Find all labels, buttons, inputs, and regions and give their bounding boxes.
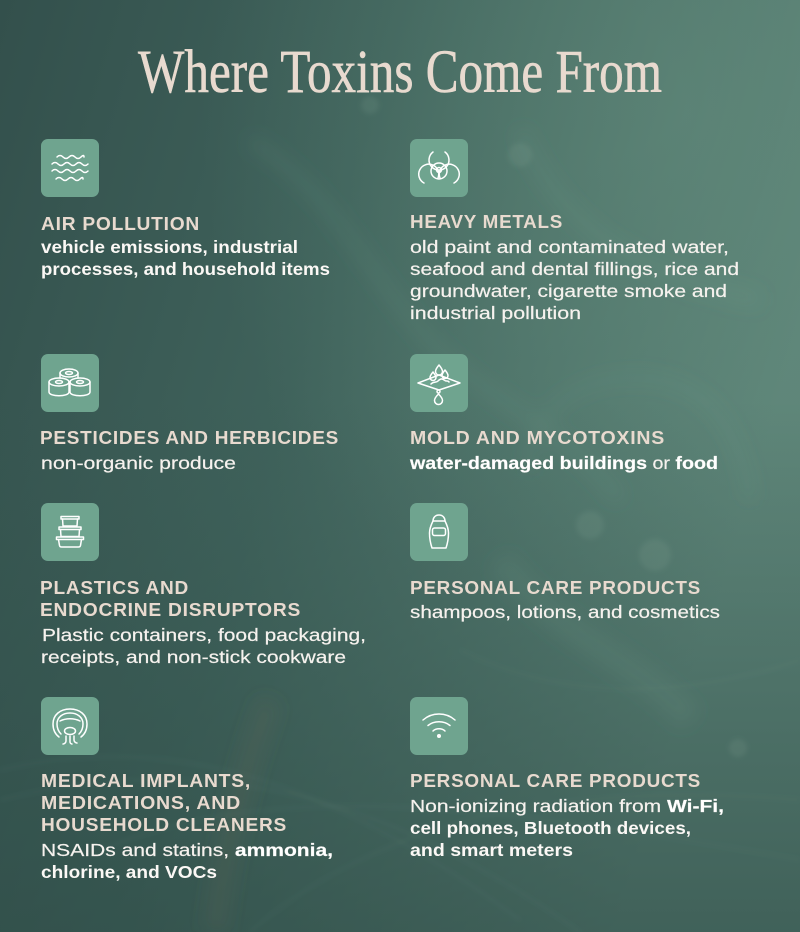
icon: biohazard bbox=[410, 139, 468, 197]
icon: mold drops bbox=[410, 354, 468, 412]
text block bbox=[41, 625, 366, 667]
heading: PESTICIDES AND HERBICIDES bbox=[40, 428, 339, 448]
text block: and smart meters bbox=[410, 840, 573, 860]
text block: seafood and dental fillings, rice and bbox=[410, 259, 739, 279]
text block: shampoos, lotions, and cosmetics bbox=[410, 602, 720, 622]
heading: MEDICAL IMPLANTS, bbox=[41, 771, 251, 791]
panel: pesticides and herbicides bbox=[40, 354, 339, 473]
text block bbox=[41, 840, 333, 882]
text block: cell phones, Bluetooth devices, bbox=[410, 818, 691, 838]
icon: rolls bbox=[41, 354, 99, 412]
heading: HOUSEHOLD CLEANERS bbox=[41, 815, 287, 835]
panel: medical implants, medications, and household cleaners bbox=[41, 697, 333, 882]
icon: face mask bbox=[41, 697, 99, 755]
text block: processes, and household items bbox=[41, 259, 330, 279]
heading bbox=[40, 578, 301, 620]
panel: mold and mycotoxins bbox=[409, 354, 718, 473]
title: Where Toxins Come From bbox=[138, 39, 662, 106]
panel: plastics and endocrine disruptors bbox=[40, 503, 366, 667]
text block bbox=[41, 237, 330, 279]
text block: receipts, and non-stick cookware bbox=[41, 647, 346, 667]
text block: vehicle emissions, industrial bbox=[41, 237, 298, 257]
text block: Plastic containers, food packaging, bbox=[42, 625, 366, 645]
heading: MOLD AND MYCOTOXINS bbox=[410, 428, 665, 448]
heading: MEDICATIONS, AND bbox=[41, 793, 241, 813]
heading bbox=[41, 771, 287, 835]
heading: ENDOCRINE DISRUPTORS bbox=[40, 600, 301, 620]
heading: PERSONAL CARE PRODUCTS bbox=[410, 578, 701, 598]
text block bbox=[410, 796, 724, 860]
text block bbox=[410, 237, 739, 323]
panel: air pollution bbox=[41, 139, 330, 279]
panel: non-ionizing radiation bbox=[410, 697, 724, 860]
text block: old paint and contaminated water, bbox=[410, 237, 729, 257]
text block: groundwater, cigarette smoke and bbox=[410, 281, 727, 301]
heading: HEAVY METALS bbox=[410, 212, 563, 232]
icon: containers bbox=[41, 503, 99, 561]
panel: personal care products bbox=[410, 503, 720, 622]
heading: PLASTICS AND bbox=[40, 578, 189, 598]
text block: non-organic produce bbox=[41, 453, 236, 473]
heading: AIR POLLUTION bbox=[41, 214, 200, 234]
icon: wifi bbox=[410, 697, 468, 755]
text block: NSAIDs and statins, ammonia, bbox=[41, 840, 333, 860]
text block: Non-ionizing radiation from Wi-Fi, bbox=[410, 796, 724, 816]
heading: PERSONAL CARE PRODUCTS bbox=[410, 771, 701, 791]
text block: water-damaged buildings or food bbox=[409, 453, 718, 473]
icon: waves bbox=[41, 139, 99, 197]
text block: chlorine, and VOCs bbox=[41, 862, 217, 882]
text block: industrial pollution bbox=[410, 303, 581, 323]
panel: heavy metals bbox=[410, 139, 739, 323]
icon: bottle bbox=[410, 503, 468, 561]
